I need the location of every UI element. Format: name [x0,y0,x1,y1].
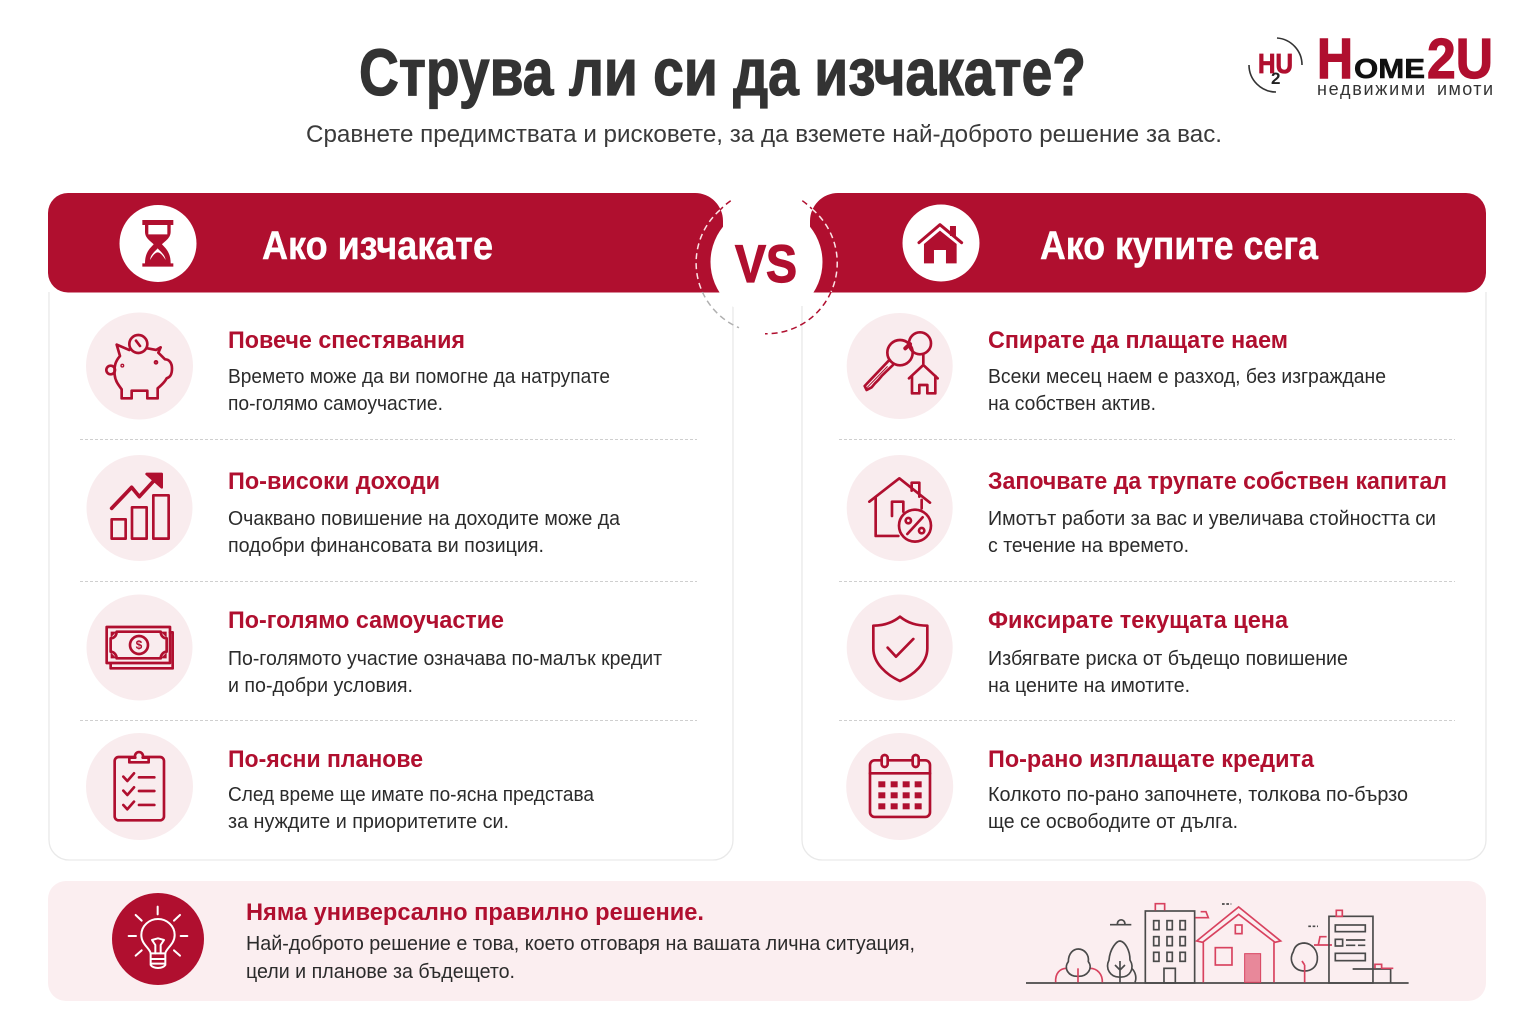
row: build equity [847,455,1447,561]
description [228,784,595,833]
subtitle: Сравнете предимствата и рисковете, за да вземете най-доброто решение за вас. [306,121,1222,148]
description: по-голямо самоучастие. [228,393,443,415]
icon: banknotes [86,594,192,700]
description: По-голямото участие означава по-малък кредит [228,648,662,670]
icon: shield [847,594,953,700]
description [228,366,610,415]
description: След време ще имате по-ясна представа [228,784,595,806]
description: за нуждите и приоритетите си. [228,811,509,833]
logo: Home2U: 2U [1427,27,1493,91]
heading: Започвате да трупате собствен капитал [988,468,1447,495]
logo: Home2U: недвижими [1317,79,1425,99]
description [228,508,621,557]
description: Очаквано повишение на доходите може да [228,508,621,530]
logo: Home2U: H [1317,27,1353,91]
description [988,508,1436,557]
description: Всеки месец наем е разход, без изграждане [988,366,1386,388]
row: stop paying rent [847,313,1386,419]
icon: calendar [846,733,953,840]
logo: Home2U: HU [1258,48,1293,79]
description: цели и планове за бъдещето. [246,961,515,983]
row: more savings [86,312,610,420]
title: Струва ли си да изчакате? [359,35,1086,109]
panel: if you wait [49,292,733,860]
icon: clipboard [86,733,193,840]
icon: light bulb [112,893,204,985]
description: на собствен актив. [988,393,1156,415]
heading: Няма универсално правилно решение. [246,899,704,926]
description [988,784,1408,833]
heading: По-голямо самоучастие [228,607,504,634]
header: if you wait [48,193,723,292]
description: на цените на имотите. [988,675,1190,697]
row: repay loan sooner [846,733,1408,840]
icon: house [902,204,980,282]
row: lock current price [847,594,1348,700]
header: if you buy now [810,193,1486,292]
description [246,933,915,983]
icon: hourglass [120,205,196,282]
illustration: town skyline [1026,904,1409,983]
heading: Ако купите сега [1040,224,1319,268]
bottom callout panel [48,881,1486,1001]
logo: Home2U: 2 [1271,69,1280,88]
description: и по-добри условия. [228,675,413,697]
icon: keys and house [847,313,953,419]
row: higher income [86,455,621,561]
description: с течение на времето. [988,535,1189,557]
heading: Повече спестявания [228,327,465,354]
description: Най-доброто решение е това, което отговаря на вашата лична ситуация, [246,933,915,955]
description: Колкото по-рано започнете, толкова по-бързо [988,784,1408,806]
icon: growth chart [86,455,192,561]
heading: Спирате да плащате наем [988,327,1288,354]
description: Имотът работи за вас и увеличава стойността си [988,508,1436,530]
logo: Home2U: имоти [1437,79,1493,99]
VS badge [696,201,837,334]
VS badge: VS [735,235,797,294]
heading: Фиксирате текущата цена [988,607,1289,634]
panel: if you buy now [802,292,1486,860]
heading: Ако изчакате [262,224,493,268]
icon: house with percent [847,455,953,561]
description [988,366,1386,415]
description: Избягвате риска от бъдещо повишение [988,648,1348,670]
description: ще се освободите от дълга. [988,811,1238,833]
description [228,648,662,697]
icon: banknotes: $ [136,638,143,652]
logo: Home2U: OME [1354,53,1425,84]
heading: По-ясни планове [228,746,423,773]
row: clearer plans [86,733,595,840]
icon: piggy bank [86,312,193,420]
description [988,648,1348,697]
description: Времето може да ви помогне да натрупате [228,366,610,388]
heading: По-рано изплащате кредита [988,746,1315,773]
heading: По-високи доходи [228,468,440,495]
logo: Home2U [1249,27,1493,99]
description: подобри финансовата ви позиция. [228,535,544,557]
row: larger down payment [86,594,662,700]
